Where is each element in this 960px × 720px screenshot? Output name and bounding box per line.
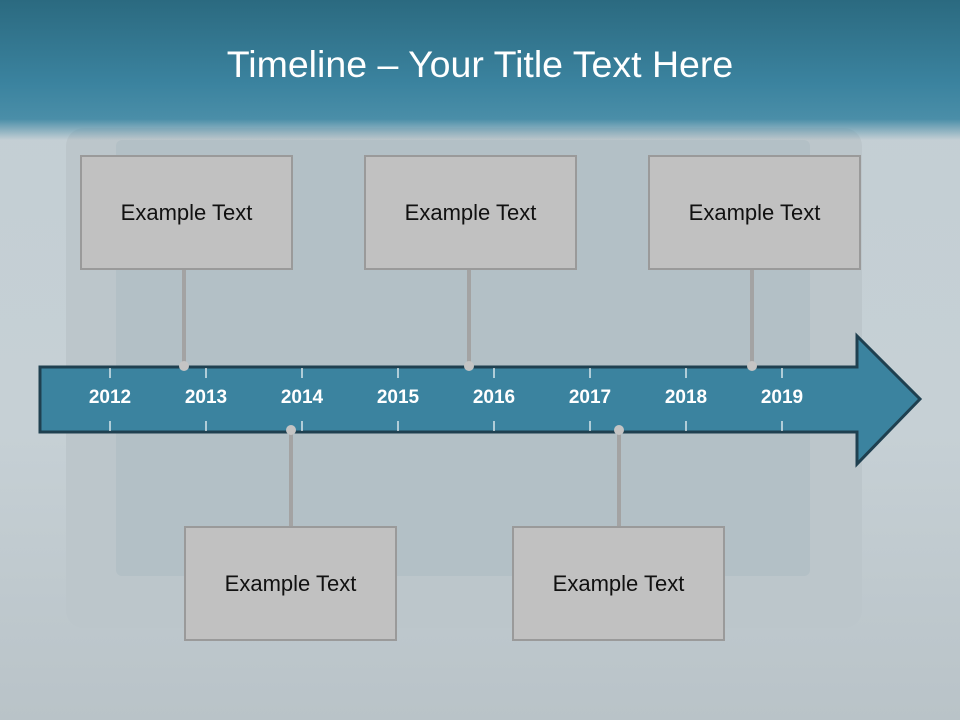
timeline arrow: 2014 — [281, 387, 324, 408]
timeline arrow: 2015 — [377, 387, 420, 408]
timeline arrow: 2018 — [665, 387, 707, 408]
title: Timeline – Your Title Text Here — [227, 43, 733, 85]
box: top 1: Example Text — [121, 200, 252, 224]
timeline arrow: 2019 — [761, 387, 803, 408]
box: top 3: Example Text — [689, 200, 820, 224]
box: bottom 1: Example Text — [225, 570, 356, 596]
timeline arrow: 2017 — [569, 387, 611, 408]
box: top 2: Example Text — [405, 200, 536, 224]
timeline arrow: 2016 — [473, 387, 515, 408]
header band — [0, 0, 960, 140]
timeline arrow: 2013 — [185, 387, 227, 408]
connectors — [179, 268, 757, 527]
box: bottom 1 — [184, 526, 397, 641]
timeline arrow: 2012 — [89, 387, 131, 408]
box: bottom 2: Example Text — [553, 570, 684, 596]
box: bottom 2 — [512, 526, 725, 641]
box: top 3 — [648, 155, 861, 270]
box: top 1 — [80, 155, 293, 270]
box: top 2 — [364, 155, 577, 270]
background tablet — [66, 128, 862, 628]
